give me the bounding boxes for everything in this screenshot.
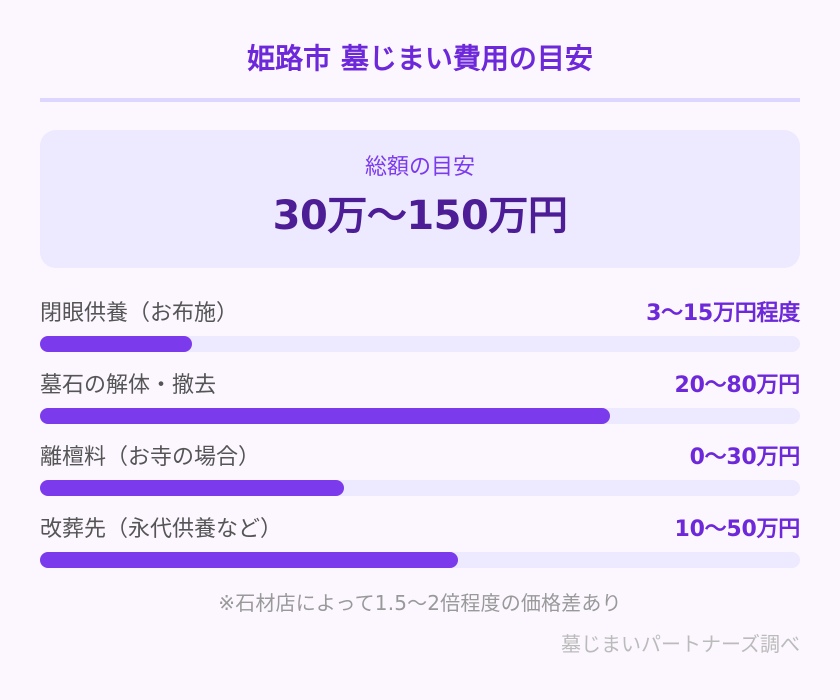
total label: 総額の目安 xyxy=(365,155,475,180)
bar xyxy=(40,336,800,352)
value: 10〜50万円 xyxy=(675,517,800,542)
value: 0〜30万円 xyxy=(690,445,800,470)
label: 閉眼供養（お布施） xyxy=(40,301,238,326)
row: 閉眼供養 xyxy=(40,300,800,352)
bar xyxy=(40,480,800,496)
value: 20〜80万円 xyxy=(675,373,800,398)
panel: total estimate xyxy=(40,130,800,268)
row: 改葬先 xyxy=(40,517,800,568)
bar xyxy=(40,552,800,568)
source: 墓じまいパートナーズ調べ xyxy=(561,632,800,656)
title: 姫路市 墓じまい費用の目安 xyxy=(247,42,593,75)
row: 墓石の解体・撤去 xyxy=(40,367,800,424)
bar xyxy=(40,408,800,424)
label: 墓石の解体・撤去 xyxy=(40,367,216,399)
row: 離檀料 xyxy=(40,445,800,496)
total amount: 30万〜150万円 xyxy=(273,193,567,239)
footnote: ※石材店によって1.5〜2倍程度の価格差あり xyxy=(218,591,622,615)
label: 離檀料（お寺の場合） xyxy=(40,445,260,470)
value: 3〜15万円程度 xyxy=(646,301,800,326)
label: 改葬先（永代供養など） xyxy=(40,517,282,542)
